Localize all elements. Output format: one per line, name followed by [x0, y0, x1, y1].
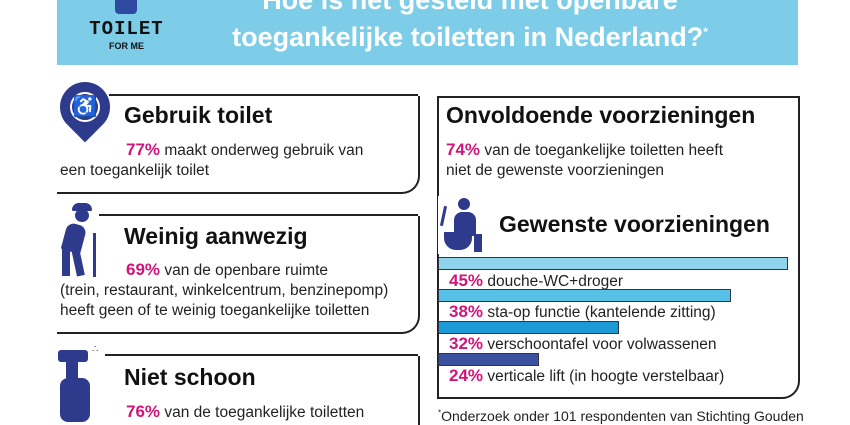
- heading: gewenste voorzieningen: Gewenste voorzieningen: [499, 211, 770, 237]
- icon: elderly person: [61, 203, 96, 277]
- text: 69%: (trein, restaurant, winkelcentrum, benzinepomp): [60, 282, 388, 299]
- bar 24%: [438, 353, 539, 366]
- text: 77%: 77% maakt onderweg gebruik van: [126, 140, 363, 159]
- text: 77%: een toegankelijk toilet: [60, 162, 209, 179]
- heading: onvoldoende voorzieningen: Onvoldoende voorzieningen: [446, 102, 755, 128]
- text: 74%: [446, 140, 723, 179]
- label 32%: 32% verschoontafel voor volwassenen: [449, 334, 717, 353]
- icon: person on toilet: [438, 196, 488, 254]
- icon: wheelchair pin: ♿: [73, 96, 97, 118]
- heading: gebruik toilet: Gebruik toilet: [124, 102, 272, 128]
- logo: [89, 0, 164, 51]
- bar chart: [438, 257, 788, 385]
- panel: niet schoon: [57, 356, 420, 425]
- label 45%: 45% douche-WC+droger: [449, 271, 623, 290]
- icon: spray bottle: [58, 344, 98, 422]
- title: [232, 0, 708, 52]
- text: 77%: [60, 140, 363, 179]
- logo: TOILET: [89, 18, 164, 40]
- text: 69%: [60, 260, 388, 319]
- title: toegankelijke toiletten in Nederland?*: [232, 22, 708, 52]
- icon: spray bottle: ∴: [92, 344, 98, 355]
- heading: niet schoon: Niet schoon: [124, 364, 256, 390]
- text: 74%: 74% van de toegankelijke toiletten heeft: [446, 140, 723, 159]
- panel: gebruik toilet: [57, 96, 420, 194]
- text: 69%: 69% van de openbare ruimte: [126, 260, 328, 279]
- icon: toilet logo: [115, 0, 137, 14]
- text: 76%: 76% van de toegankelijke toiletten: [126, 402, 364, 421]
- panel: onvoldoende voorzieningen: [437, 96, 800, 399]
- logo: FOR ME: [109, 41, 144, 51]
- panel: weinig aanwezig: [57, 216, 420, 334]
- bar 45%: [438, 257, 788, 270]
- icon: wheelchair pin: [60, 82, 110, 142]
- label 24%: 24% verticale lift (in hoogte verstelbaar): [449, 366, 724, 385]
- label 38%: 38% sta-op functie (kantelende zitting): [449, 302, 716, 321]
- bar 38%: [438, 289, 731, 302]
- text: 69%: heeft geen of te weinig toegankelijke toiletten: [60, 302, 369, 319]
- heading: weinig aanwezig: Weinig aanwezig: [124, 223, 308, 249]
- bar 32%: [438, 321, 619, 334]
- footnote: *Onderzoek onder 101 respondenten van Stichting Gouden: [438, 408, 804, 424]
- header band: [57, 0, 798, 65]
- text: 74%: niet de gewenste voorzieningen: [446, 162, 664, 179]
